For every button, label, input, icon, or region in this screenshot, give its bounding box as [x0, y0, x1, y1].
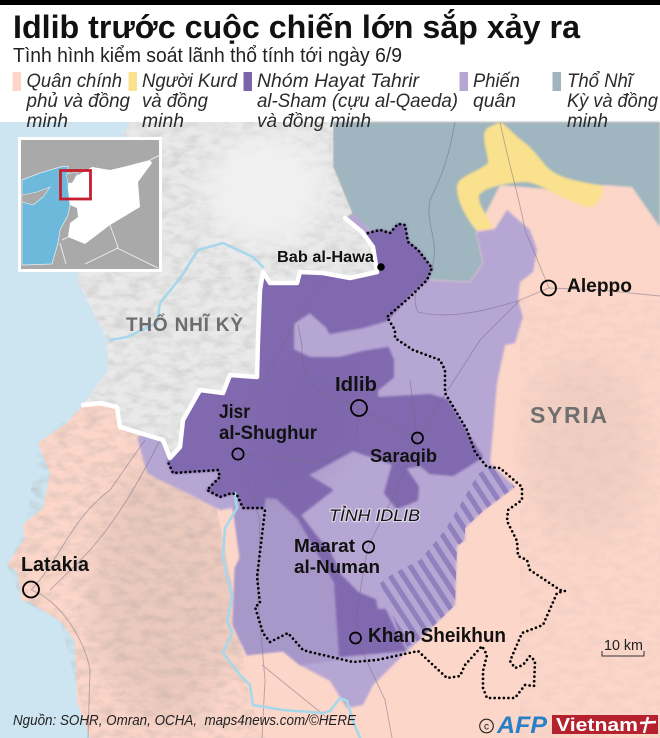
legend: Kurds [128, 70, 238, 132]
Vietnam+ logo [552, 715, 658, 735]
legend: HTS: và đồng minh [257, 110, 371, 132]
top black bar [0, 0, 660, 5]
roads [31, 122, 660, 738]
legend: rebels: Phiến [473, 70, 520, 92]
label: Jisr al-Shughur: Jisr [219, 402, 251, 423]
Kurdish-controlled area [457, 122, 603, 230]
rivers [110, 243, 360, 738]
label: Maarat al-Numan: Maarat [294, 536, 355, 556]
inset background [20, 138, 160, 270]
Idlib province dotted border [168, 224, 565, 698]
label: Khan Sheikhun: Khan Sheikhun [368, 625, 506, 647]
label: Maarat al-Numan [294, 536, 380, 577]
Hayat Tahrir al-Sham area [168, 224, 482, 656]
legend: government: phủ và đồng [26, 90, 130, 112]
Vietnam+ logo: Vietnam [556, 715, 638, 735]
inset red locator rectangle [60, 170, 90, 199]
legend: HTS: al-Sham (cựu al-Qaeda) [257, 90, 458, 112]
label: Latakia: Latakia [21, 553, 90, 576]
Turkey territory [77, 122, 377, 458]
label: Aleppo: Aleppo [567, 275, 632, 297]
label: Bab al-Hawa [277, 249, 385, 271]
Turkish-controlled area [333, 122, 660, 282]
legend: government [12, 70, 130, 132]
scale bar: 10 km [604, 638, 643, 654]
label: Idlib province: TỈNH IDLIB [329, 506, 420, 525]
label: Turkey: THỔ NHĨ KỲ [126, 314, 243, 336]
copyright and AFP logo: c [484, 722, 489, 732]
label: Saraqib [370, 432, 437, 466]
inset Cyprus [22, 187, 50, 205]
label: Jisr al-Shughur: al-Shughur [219, 423, 318, 444]
label: Latakia [21, 553, 90, 598]
source note: Nguồn: SOHR, Omran, OCHA, maps4news.com/©HERE [13, 713, 356, 729]
label: Syria: SYRIA [530, 402, 607, 428]
legend: Kurds: và đồng [142, 90, 208, 112]
rebel-held area [137, 210, 537, 708]
legend: Turkey: minh [567, 110, 608, 132]
label: Idlib [335, 373, 377, 416]
Turkey white border [83, 218, 377, 458]
desert shading in Syria [520, 300, 660, 738]
mountain shading on the coast [0, 400, 270, 738]
darker band in HTS area [262, 370, 350, 500]
rebel area, western darker part [233, 497, 340, 665]
inset sea [22, 166, 70, 265]
label: Idlib: Idlib [335, 373, 377, 396]
label: Jisr al-Shughur [219, 402, 318, 460]
legend: Turkey: Thổ Nhĩ [567, 70, 635, 92]
inset country borders [60, 155, 160, 268]
Turkey hill shading [60, 122, 380, 462]
legend: Kurds: Người Kurd [142, 70, 238, 92]
label: Maarat al-Numan: al-Numan [294, 557, 380, 577]
inset Syria [68, 160, 152, 244]
legend [12, 70, 658, 132]
title: Idlib trước cuộc chiến lớn sắp xảy ra [13, 9, 580, 45]
legend: Turkey [552, 70, 658, 132]
legend: government: Quân chính [26, 70, 122, 92]
legend: HTS: Nhóm Hayat Tahrir [257, 70, 420, 92]
subtitle: Tình hình kiểm soát lãnh thổ tính tới ngày 6/9 [13, 44, 402, 67]
hatched contested area [380, 466, 515, 648]
inset Hatay sliver [66, 172, 78, 183]
legend: rebels [460, 70, 520, 112]
label: Saraqib: Saraqib [370, 445, 437, 466]
legend: Kurds: minh [142, 110, 184, 132]
legend: rebels: quân [473, 90, 516, 112]
legend: government: minh [26, 110, 68, 132]
place labels [21, 249, 632, 647]
inset locator map [20, 138, 160, 270]
label: Bab al-Hawa: Bab al-Hawa [277, 249, 374, 266]
legend: HTS [244, 70, 458, 132]
